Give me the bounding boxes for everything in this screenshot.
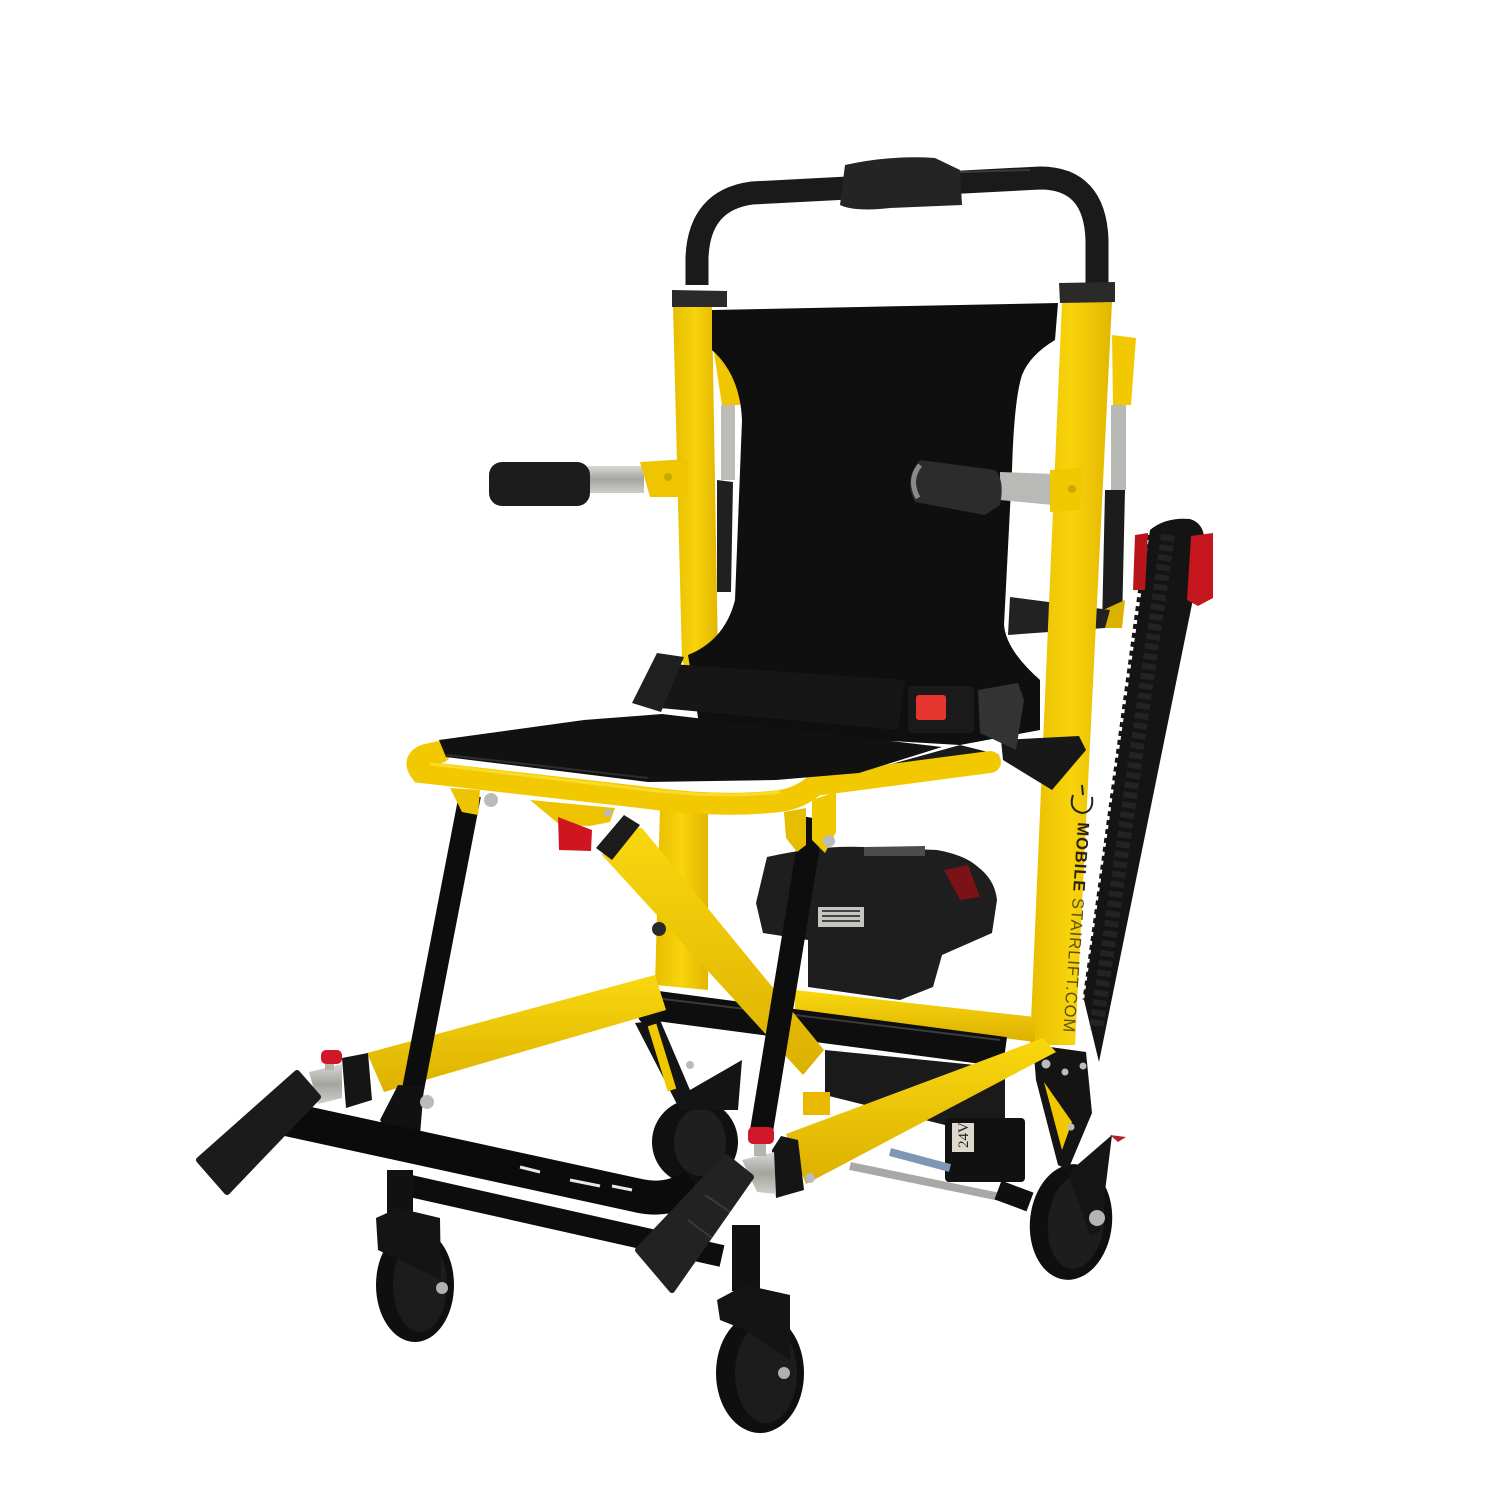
under-seat centre post [655,808,708,990]
left front caster [376,1170,454,1342]
seat belt [632,653,1086,790]
battery pack [756,846,997,1000]
left handle grip [199,1073,318,1192]
seat frame tube [417,745,1000,853]
left armrest [489,459,688,506]
right handle grip [638,1157,751,1290]
track red reflector [1187,533,1213,606]
rear right upright [1008,335,1148,635]
chrome rod [850,1152,1030,1202]
main right upright post [1030,282,1115,1045]
left upright post [672,290,727,680]
seat cushion [439,714,942,782]
yellow rear base rail [786,1038,1056,1184]
track belt [1084,519,1213,1062]
motor voltage label: 24V [956,1122,972,1148]
rear left upright [712,340,742,592]
rear seat legs [380,795,813,1145]
rear right mounting plate [1034,1046,1092,1170]
belt buckle [908,686,974,733]
brand text on post: MOBILE STAIRLIFT.COM [1059,822,1092,1034]
rear drive axles [638,988,1005,1125]
red release button [916,695,946,720]
rear left wheel [635,1020,742,1185]
warning sticker [803,1092,830,1115]
left base rail [309,975,666,1108]
right end cap of rail [742,1127,804,1198]
right front caster [716,1225,804,1433]
rear right wheel [1024,1135,1126,1284]
backrest [688,303,1058,745]
front tube and lower tube [268,1115,722,1256]
right armrest [910,460,1082,515]
yellow folding brace [530,800,824,1075]
logo swirl [1072,785,1092,813]
top push handle [697,157,1097,285]
rear yellow crossbar [795,990,1035,1042]
drive motor [945,1118,1025,1182]
red latch [558,817,592,851]
